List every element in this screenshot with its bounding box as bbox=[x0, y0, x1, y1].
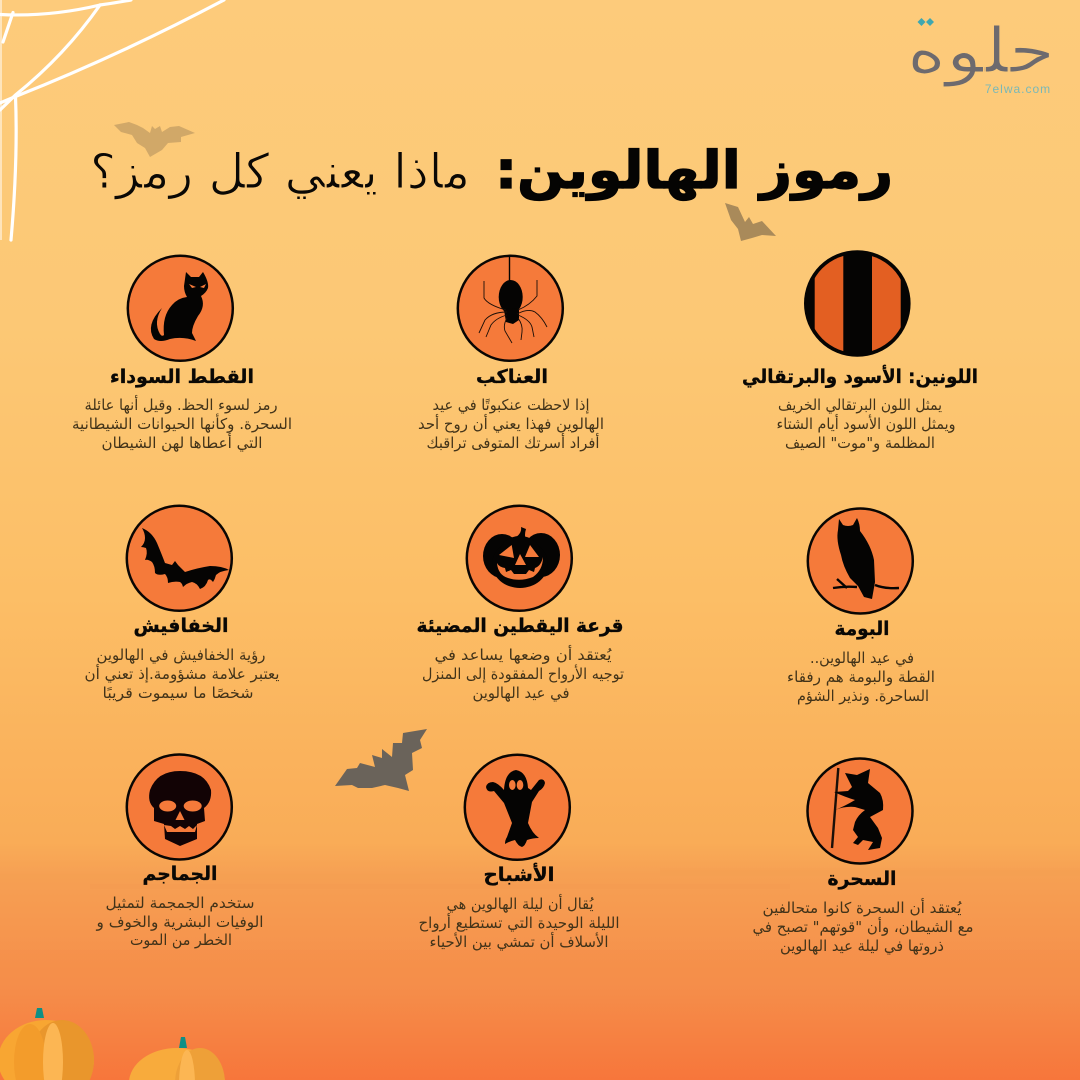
description: الوفيات البشرية والخوف و bbox=[95, 913, 264, 931]
heading: اللونين: الأسود والبرتقالي bbox=[742, 365, 978, 388]
icon: black cat bbox=[128, 256, 233, 361]
heading: القطط السوداء bbox=[110, 366, 254, 388]
description: السحرة. وكأنها الحيوانات الشيطانية bbox=[72, 413, 292, 433]
description: الليلة الوحيدة التي تستطيع أرواح bbox=[418, 913, 620, 933]
decorative bat: large gray bbox=[335, 729, 427, 791]
title thin part: ماذا يعني كل رمز؟ bbox=[90, 144, 470, 200]
icon: ghost bbox=[465, 755, 570, 860]
decorative bat: tan bbox=[114, 122, 195, 157]
description: شخصًا ما سيموت قريبًا bbox=[102, 684, 254, 702]
heading: الأشباح bbox=[484, 863, 554, 886]
description: ذروتها في ليلة عيد الهالوين bbox=[780, 937, 944, 956]
pumpkin: bottom center bbox=[129, 1037, 225, 1080]
description: أفراد أسرتك المتوفى تراقبك bbox=[426, 433, 600, 452]
card: bats bbox=[84, 506, 280, 702]
title bbox=[90, 141, 893, 201]
heading: قرعة اليقطين المضيئة bbox=[416, 615, 624, 637]
description bbox=[72, 395, 292, 453]
card: skulls bbox=[95, 754, 264, 949]
description: توجيه الأرواح المفقودة إلى المنزل bbox=[422, 664, 624, 683]
icon: orange and black stripes bbox=[804, 250, 911, 360]
logo bbox=[907, 14, 1055, 96]
card: black and orange bbox=[742, 250, 978, 452]
description bbox=[422, 645, 624, 703]
description bbox=[84, 646, 280, 702]
heading: الخفافيش bbox=[134, 615, 228, 637]
card: ghosts bbox=[418, 755, 620, 952]
heading: الجماجم bbox=[142, 863, 218, 885]
description: يعتبر علامة مشؤومة.إذ تعني أن bbox=[84, 664, 280, 684]
description bbox=[787, 649, 935, 705]
logo wordmark: حلوه bbox=[907, 14, 1055, 87]
description bbox=[95, 894, 264, 949]
description: في عيد الهالوين.. bbox=[810, 649, 914, 668]
logo dots bbox=[918, 18, 934, 26]
description: يُعتقد أن السحرة كانوا متحالفين bbox=[762, 898, 962, 917]
description: مع الشيطان، وأن "قوتهم" تصبح في bbox=[752, 917, 974, 937]
description: يمثل اللون البرتقالي الخريف bbox=[778, 396, 942, 415]
card: witches bbox=[752, 758, 974, 956]
description bbox=[418, 894, 620, 952]
icon: bat bbox=[127, 506, 232, 611]
card: black cats bbox=[72, 256, 292, 453]
icon: owl bbox=[808, 508, 913, 614]
spider web bbox=[0, 0, 224, 240]
description: الأسلاف أن تمشي بين الأحياء bbox=[430, 932, 608, 952]
description: المظلمة و"موت" الصيف bbox=[785, 434, 935, 452]
icon: skull bbox=[127, 754, 232, 860]
description: في عيد الهالوين bbox=[472, 684, 570, 703]
logo url: 7elwa.com bbox=[985, 82, 1051, 96]
description: يُقال أن ليلة الهالوين هي bbox=[446, 894, 594, 914]
description: رؤية الخفافيش في الهالوين bbox=[96, 646, 266, 665]
decorative bat: brown bbox=[725, 203, 776, 241]
description bbox=[418, 396, 604, 452]
description: القطة والبومة هم رفقاء bbox=[787, 668, 935, 686]
description: الهالوين فهذا يعني أن روح أحد bbox=[418, 414, 604, 434]
description: رمز لسوء الحظ. وقيل أنها عائلة bbox=[84, 395, 278, 414]
description: التي أعطاها لهن الشيطان bbox=[102, 433, 262, 453]
icon: pumpkin bbox=[467, 506, 572, 611]
card: spiders bbox=[418, 256, 604, 452]
description bbox=[776, 396, 956, 452]
description: ستخدم الجمجمة لتمثيل bbox=[106, 894, 254, 912]
description: الخطر من الموت bbox=[130, 931, 232, 949]
description: ويمثل اللون الأسود أيام الشتاء bbox=[776, 414, 956, 433]
description: إذا لاحظت عنكبوتًا في عيد bbox=[432, 396, 590, 415]
description bbox=[752, 898, 974, 956]
description: يُعتقد أن وضعها يساعد في bbox=[434, 645, 612, 665]
icon: witch bbox=[808, 758, 912, 864]
heading: البومة bbox=[834, 618, 890, 640]
card: jack-o-lantern bbox=[416, 506, 624, 703]
heading: العناكب bbox=[476, 366, 548, 388]
pumpkin: bottom left bbox=[0, 1008, 94, 1080]
heading: السحرة bbox=[828, 868, 896, 890]
description: الساحرة. ونذير الشؤم bbox=[797, 687, 929, 705]
icon: spider bbox=[458, 256, 563, 361]
card: owl bbox=[787, 508, 935, 705]
title bold part: رموز الهالوين: bbox=[495, 141, 893, 201]
